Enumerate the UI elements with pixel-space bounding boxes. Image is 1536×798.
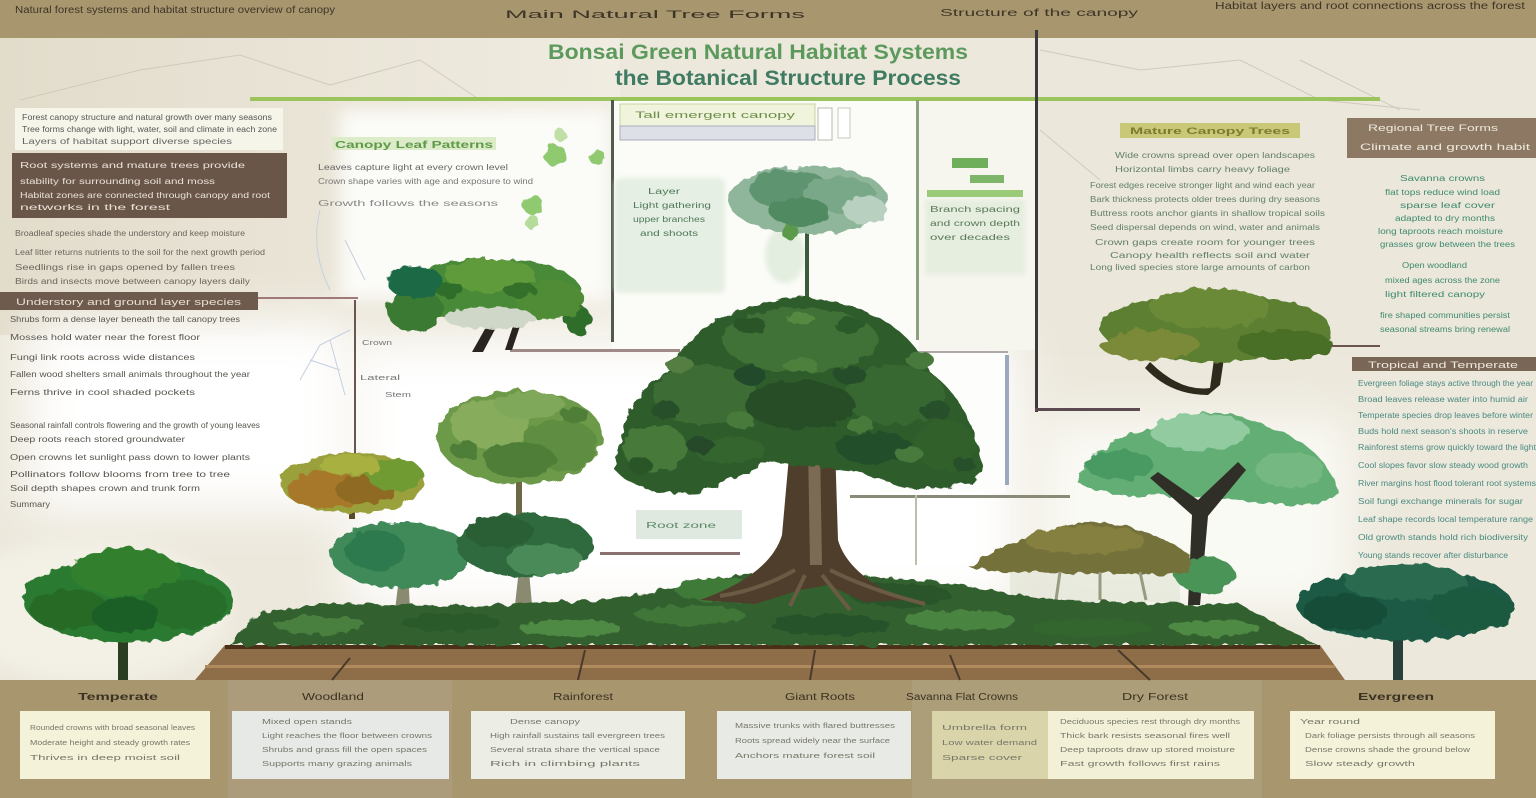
faint hill contour lines (20, 50, 1420, 180)
panel: brown heading block: Root systems and mature trees provide (20, 161, 246, 170)
text block: right upper: Open woodland (1402, 261, 1467, 270)
text block: left upper: Seedlings rise in gaps opened by fallen trees (15, 263, 235, 272)
panel: upper right text: Bark thickness protects older trees during dry seasons (1090, 195, 1320, 204)
column: panel 6: Year round (1300, 719, 1360, 726)
tree: right flat top (1100, 288, 1333, 395)
column: panel 4 (717, 692, 911, 779)
column: panel 6: Evergreen (1358, 692, 1434, 703)
panel: center top: and shoots (640, 229, 698, 238)
column: panel 5: Fast growth follows first rains (1060, 761, 1221, 768)
text block: right lower: Leaf shape records local temperature range (1358, 515, 1534, 524)
column: panel 5: Deciduous species rest through dry months (1060, 719, 1241, 726)
tree: autumn shrub (280, 453, 424, 519)
panel: upper right text: Horizontal limbs carry heavy foliage (1115, 165, 1291, 174)
panel: faint map sketch (300, 210, 365, 395)
text block: right upper: light filtered canopy (1385, 290, 1485, 299)
column: panel 2: Supports many grazing animals (262, 761, 413, 768)
heading bar: right middle: Tropical and Temperate (1368, 360, 1518, 370)
panel: upper right text: Long lived species store large amounts of carbon (1090, 263, 1310, 272)
panel: leaf heading and text: Crown shape varies with age and exposure to wind (318, 177, 533, 186)
column: panel 5: Deep taproots draw up stored moisture (1060, 747, 1235, 754)
panel: center top: upper branches (633, 215, 705, 224)
title: the Botanical Structure Process (615, 67, 961, 90)
text block: right upper: long taproots reach moisture (1378, 227, 1504, 236)
text block: left lower: Seasonal rainfall controls flowering and the growth of young leaves (10, 421, 260, 430)
column: panel 2: Shrubs and grass fill the open spaces (262, 747, 428, 754)
panel: upper left note: Tree forms change with light, water, soil and climate in each zone (22, 125, 278, 134)
text block: left lower: Shrubs form a dense layer beneath the tall canopy trees (10, 315, 240, 324)
text block: right upper: adapted to dry months (1395, 214, 1495, 223)
tree: flat olive (970, 522, 1235, 602)
text block: left lower: Pollinators follow blooms from tree to tree (10, 470, 231, 479)
column: panel 3 (471, 692, 685, 779)
panel: upper right text: Forest edges receive stronger light and wind each year (1090, 181, 1315, 190)
panel: upper left note (15, 108, 283, 150)
column: panel 2: Woodland (302, 692, 364, 703)
top band: Main Natural Tree Forms (505, 9, 806, 21)
panel: right of center: and crown depth (930, 219, 1020, 228)
ground: moss and soil (195, 568, 1345, 680)
panel: brown heading block (12, 153, 287, 218)
text block: left lower: Ferns thrive in cool shaded pockets (10, 388, 195, 397)
column: panel 1 (20, 692, 210, 779)
tree: middle left (437, 390, 603, 515)
panel: right heading (1347, 118, 1536, 158)
text block: right lower: Rainforest stems grow quickly toward the light (1358, 443, 1536, 452)
panel: upper right text: Seed dispersal depends on wind, water and animals (1090, 223, 1320, 232)
panel: upper right text: Wide crowns spread over open landscapes (1115, 151, 1315, 160)
text block: left lower: Summary (10, 500, 50, 509)
column: panel 4: Anchors mature forest soil (735, 753, 876, 760)
panel: right heading: Regional Tree Forms (1368, 123, 1499, 133)
column: panel 5: Low water demand (942, 740, 1037, 747)
column: panel 2: Mixed open stands (262, 719, 353, 726)
panel: right of center: over decades (930, 233, 1010, 242)
text block: right upper (1378, 174, 1515, 334)
text block: left upper: Broadleaf species shade the understory and keep moisture (15, 229, 246, 238)
top band (0, 0, 1536, 38)
text block: right lower: Evergreen foliage stays active through the year (1358, 379, 1533, 388)
text block: left upper: Birds and insects move between canopy layers daily (15, 277, 250, 286)
small labels center left: Lateral (360, 375, 401, 382)
panel: upper right text: Crown gaps create room for younger trees (1095, 238, 1315, 247)
callout: center note (636, 510, 742, 539)
column: panel 2 (232, 692, 449, 779)
text block: right upper: mixed ages across the zone (1385, 276, 1501, 285)
column: panel 5: Sparse cover (942, 755, 1023, 762)
text block: right lower: Soil fungi exchange minerals for sugar (1358, 497, 1523, 506)
panel: upper left note: Forest canopy structure and natural growth over many seasons (22, 113, 272, 122)
text block: left lower: Open crowns let sunlight pass down to lower plants (10, 453, 250, 462)
panel: leaf heading and text (318, 137, 533, 208)
text block: right lower: Broad leaves release water into humid air (1358, 395, 1528, 404)
panel: upper right text: Canopy health reflects soil and water (1110, 251, 1311, 260)
column: panel 5 (906, 692, 1254, 779)
text block: left lower: Fallen wood shelters small animals throughout the year (10, 370, 250, 379)
column: panel 5: Dry Forest (1122, 692, 1188, 703)
small labels center left: Crown (362, 340, 392, 347)
column: panel 4: Massive trunks with flared buttresses (735, 723, 896, 730)
panel: brown heading block: stability for surrounding soil and moss (20, 177, 215, 186)
title rule and structure lines (250, 30, 1380, 565)
column: panel 1: Moderate height and steady growth rates (30, 740, 191, 747)
text block: right upper: flat tops reduce wind load (1385, 188, 1500, 197)
panel: right of center (925, 158, 1025, 275)
column: panel 3: Several strata share the vertical space (490, 747, 660, 754)
column: panel 3: Rich in climbing plants (490, 761, 641, 768)
column: panel 6 (1290, 692, 1495, 779)
column: panel 3: Dense canopy (510, 719, 581, 726)
panel: center top: Light gathering (633, 201, 711, 210)
column: panel 6: Slow steady growth (1305, 761, 1415, 768)
panel: upper right text: Buttress roots anchor giants in shallow tropical soils (1090, 209, 1325, 218)
top band: Structure of the canopy (940, 8, 1138, 19)
top band: Habitat layers and root connections across the forest (1215, 1, 1525, 12)
panel: right heading: Climate and growth habit (1360, 142, 1531, 152)
panel: upper right text: Mature Canopy Trees (1130, 126, 1290, 136)
panel: center top: Layer (648, 187, 681, 196)
small labels center left (360, 340, 411, 399)
text block: left lower: Deep roots reach stored groundwater (10, 435, 185, 444)
text block: left lower: Soil depth shapes crown and trunk form (10, 484, 200, 493)
column: panel 5: Thick bark resists seasonal fires well (1060, 733, 1231, 740)
tree: top center sapling (728, 166, 888, 310)
column: panel 6: Dense crowns shade the ground below (1305, 747, 1471, 754)
text block: right upper: sparse leaf cover (1400, 201, 1496, 210)
top band: Natural forest systems and habitat structure overview of canopy (15, 5, 335, 16)
tree: central large (617, 297, 982, 610)
text block: right upper: grasses grow between the trees (1380, 240, 1515, 249)
text block: left lower: Mosses hold water near the forest floor (10, 333, 200, 342)
column: panel 4: Roots spread widely near the surface (735, 738, 890, 745)
small labels center left: Stem (385, 392, 411, 399)
heading bar: left middle: Understory and ground layer species (16, 297, 242, 307)
panel: brown heading block: Habitat zones are connected through canopy and root (20, 191, 271, 200)
tree: right green (1077, 413, 1340, 605)
text block: right lower: Temperate species drop leaves before winter (1358, 411, 1533, 420)
tree: lower left pair (330, 513, 593, 610)
panel: brown heading block: networks in the forest (20, 203, 172, 212)
column: panel 5: Savanna Flat Crowns (906, 692, 1018, 703)
icon: falling leaves (523, 129, 605, 229)
callout: center note: Root zone (646, 521, 717, 530)
column: panel 6: Dark foliage persists through all seasons (1305, 733, 1476, 740)
column: panel 1: Thrives in deep moist soil (30, 755, 181, 762)
text block: left lower (10, 315, 260, 509)
text block: right lower: River margins host flood tolerant root systems (1358, 479, 1536, 488)
column: panel 5: Umbrella form (942, 725, 1027, 732)
root connector lines (332, 650, 1150, 680)
panel: center top (615, 104, 850, 293)
tree: upper left broad (387, 258, 591, 352)
panel: leaf heading and text: Canopy Leaf Patterns (335, 140, 494, 151)
title (548, 41, 968, 90)
text block: right lower: Young stands recover after disturbance (1358, 551, 1509, 560)
panel: upper left note: Layers of habitat support diverse species (22, 137, 232, 146)
panel: center top: Tall emergent canopy (635, 110, 796, 120)
column: panel 1: Rounded crowns with broad seasonal leaves (30, 725, 196, 732)
panel: upper right text (1090, 123, 1325, 272)
text block: right lower: Old growth stands hold rich biodiversity (1358, 533, 1528, 542)
text block: left upper (15, 229, 265, 286)
canopy leaf clusters (628, 312, 976, 473)
text block: left upper: Leaf litter returns nutrients to the soil for the next growth period (15, 248, 265, 257)
text block: right upper: seasonal streams bring renewal (1380, 325, 1510, 334)
panel: leaf heading and text: Growth follows the seasons (318, 199, 498, 208)
panel: right of center: Branch spacing (930, 205, 1020, 214)
text block: right upper: fire shaped communities persist (1380, 311, 1511, 320)
text block: right upper: Savanna crowns (1400, 174, 1485, 183)
text block: right lower: Buds hold next season's shoots in reserve (1358, 427, 1529, 436)
title: Bonsai Green Natural Habitat Systems (548, 41, 968, 64)
column: panel 3: Rainforest (553, 692, 613, 703)
tree: far right (1297, 564, 1514, 680)
column: panel 4: Giant Roots (785, 692, 855, 703)
heading bar: left middle (0, 292, 258, 310)
column: panel 2: Light reaches the floor between crowns (262, 733, 433, 740)
column: panel 1: Temperate (78, 692, 159, 703)
bottom band (0, 680, 1536, 798)
column: panel 3: High rainfall sustains tall evergreen trees (490, 733, 666, 740)
panel: leaf heading and text: Leaves capture light at every crown level (318, 163, 508, 172)
text block: left lower: Fungi link roots across wide distances (10, 353, 195, 362)
text block: right lower: Cool slopes favor slow steady wood growth (1358, 461, 1528, 470)
tree: far left (23, 548, 233, 680)
text block: right lower (1358, 379, 1536, 560)
heading bar: right middle (1352, 357, 1536, 371)
